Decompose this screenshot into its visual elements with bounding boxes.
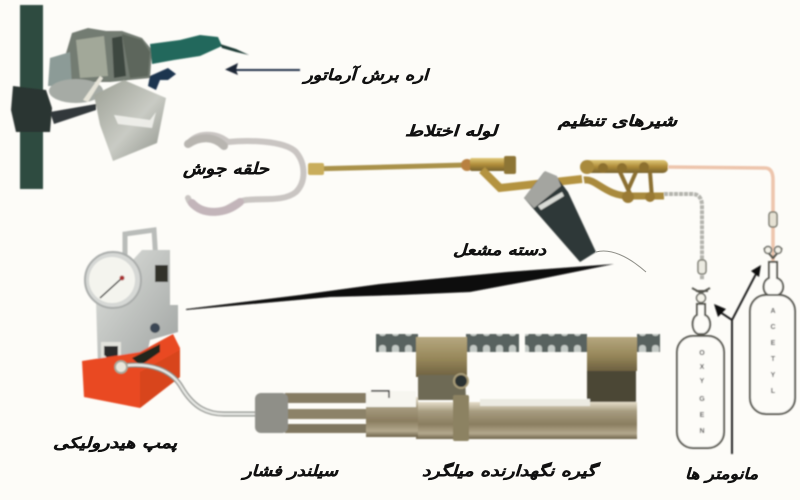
right clamp block [587, 337, 637, 371]
pressure cylinder ribs [285, 393, 366, 403]
icon: oxygen cylinder [677, 288, 724, 448]
pump red base [82, 334, 180, 408]
icon: oxygen cylinder: G [699, 396, 705, 403]
hose: acetylene [668, 167, 777, 262]
rebars [376, 334, 418, 352]
main tube [416, 402, 637, 439]
label: rebar saw: اره برش آرماتور [302, 65, 430, 84]
icon: hydraulic pump [82, 230, 180, 408]
thin cable [596, 251, 646, 272]
icon: oxygen cylinder: E [700, 412, 705, 419]
hose: black cable wedge [186, 264, 614, 310]
hose: pump to cylinder [115, 361, 256, 414]
torch handle [524, 172, 596, 262]
valve assembly top [583, 160, 668, 173]
label: manometers: مانومتر ها [685, 465, 758, 483]
icon: oxygen cylinder: X [700, 364, 705, 371]
icon: oxygen cylinder: Y [700, 378, 705, 385]
pump label plate [101, 342, 121, 364]
knurled end cap [255, 393, 288, 433]
saw grip handle [150, 35, 222, 64]
mixing tube [310, 165, 465, 169]
metal guard [94, 80, 166, 161]
label: mixing tube: لوله اختلاط [405, 122, 500, 140]
saw blade disc [49, 79, 103, 103]
arrow: manometers pointer [714, 265, 761, 454]
rebar vertical [20, 5, 43, 189]
support arm [50, 104, 96, 124]
dark blue switch [148, 68, 176, 90]
torch body tube [482, 170, 582, 188]
label: hydraulic pump: پمپ هیدرولیکی [53, 434, 178, 452]
label: pressure cylinder: سیلندر فشار [241, 462, 340, 480]
icon: acetylene cylinder: Y [771, 372, 776, 379]
pump handle [125, 230, 156, 268]
arrow: saw label pointer [225, 63, 300, 75]
icon: rebar holding clamp and pressure cylinder [255, 334, 660, 441]
valve assembly bottom [584, 180, 664, 196]
saw clamp [11, 86, 52, 132]
icon: acetylene cylinder: C [770, 324, 776, 331]
icon: rebar cutting saw [11, 5, 249, 189]
saw motor housing [64, 28, 152, 82]
hose: oxygen [664, 194, 706, 280]
label: welding ring: حلقه جوش [182, 159, 270, 179]
icon: acetylene cylinder: T [771, 356, 776, 363]
pump upper casing [96, 250, 178, 366]
pump gauge [85, 252, 141, 308]
icon: acetylene cylinder: A [770, 308, 776, 315]
icon: oxygen cylinder: N [699, 428, 705, 435]
icon: oxygen cylinder: O [699, 350, 705, 357]
clamp collar [453, 395, 469, 441]
icon: welding torch [308, 156, 668, 262]
icon: acetylene cylinder [750, 246, 795, 414]
icon: acetylene cylinder: L [771, 388, 776, 395]
icon: acetylene cylinder: E [771, 340, 776, 347]
label: rebar holding clamp: گیره نگهدارنده میلگرد [422, 462, 601, 480]
icon: welding ring [188, 135, 304, 212]
left clamp block [416, 337, 467, 377]
label: torch handle: دسته مشعل [453, 241, 548, 259]
label: control valves: شیرهای تنظیم [557, 112, 679, 130]
pressure cylinder neck [366, 397, 418, 437]
